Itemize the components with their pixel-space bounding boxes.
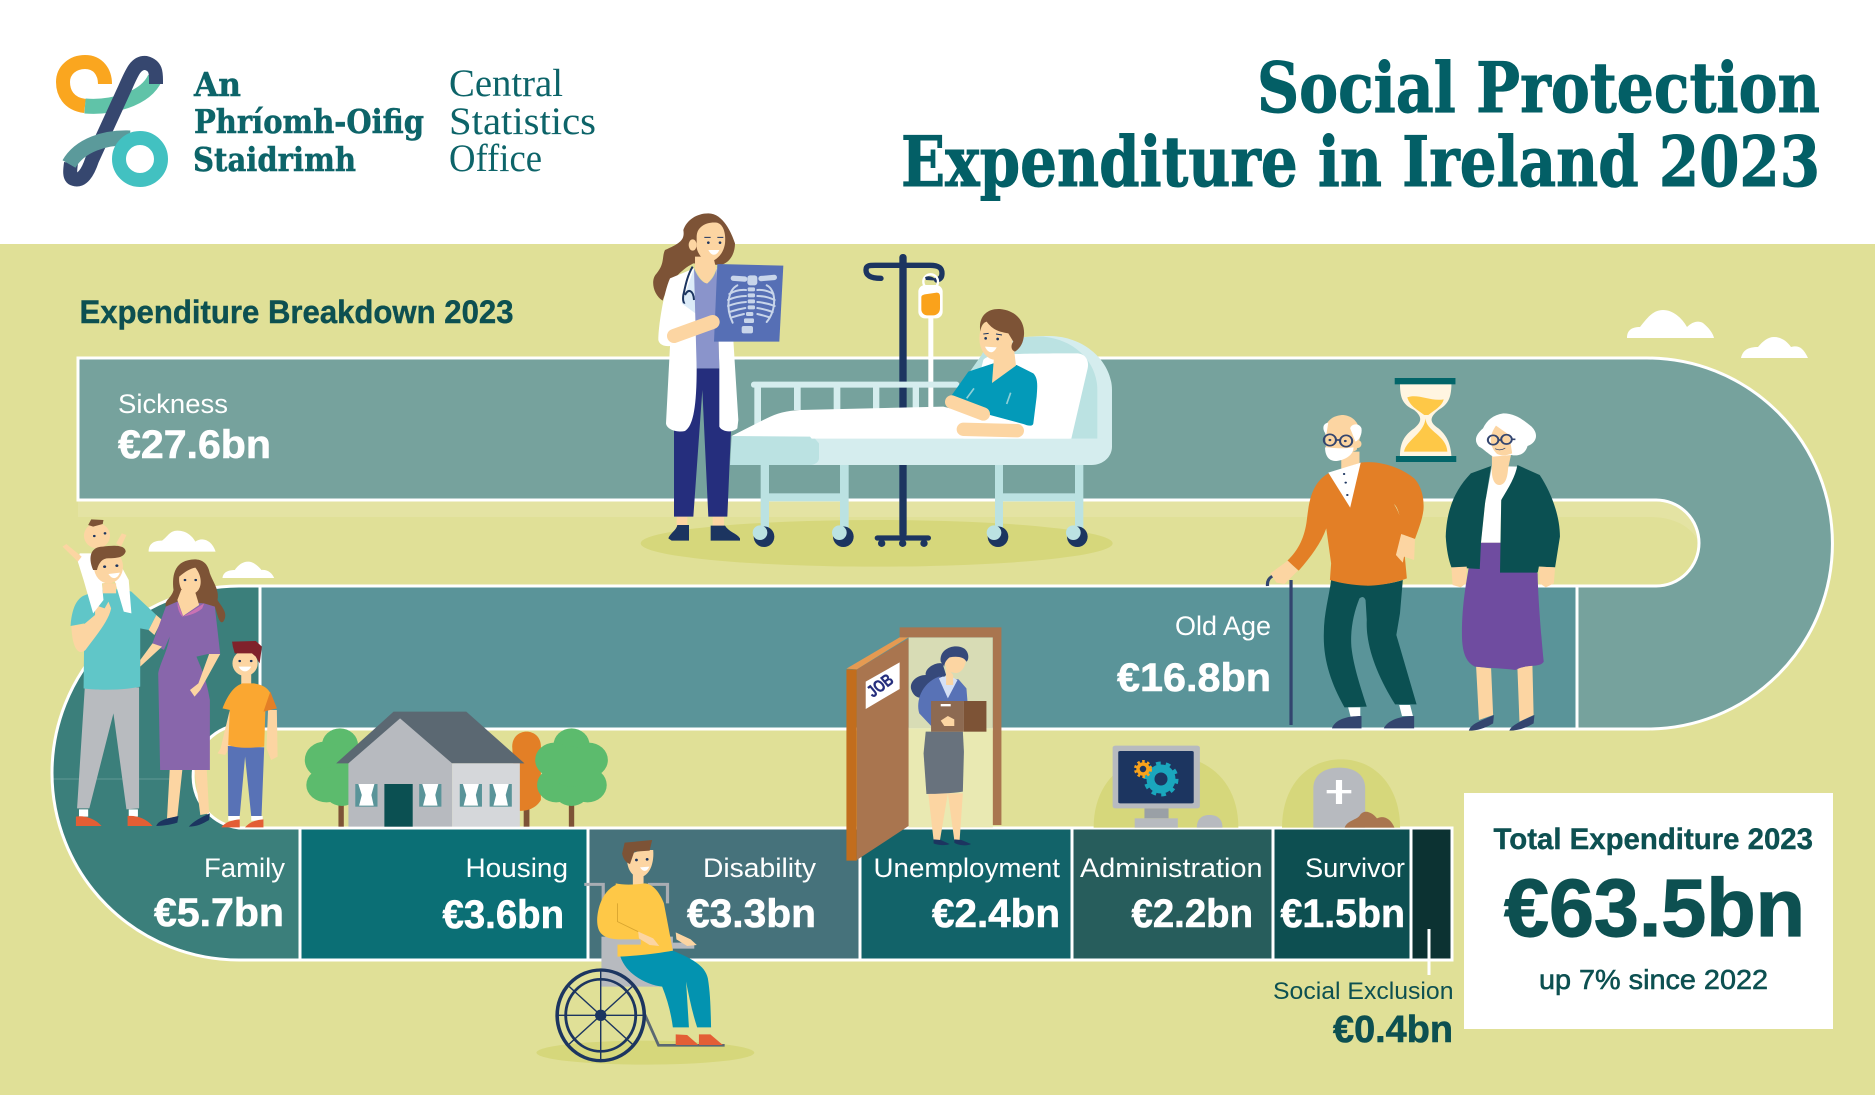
- segment: disability: [588, 828, 860, 960]
- label: unemployment: Unemployment: [874, 853, 1061, 883]
- wheels: [753, 525, 1088, 547]
- label: sickness: [118, 389, 271, 467]
- label: sickness: Sickness: [118, 389, 228, 419]
- segment: administration: [1072, 828, 1273, 960]
- logo wordmark Irish: [193, 65, 424, 179]
- label: old age: [1117, 611, 1271, 700]
- label: family: Family: [204, 853, 286, 883]
- illustration: man in wheelchair: [536, 840, 754, 1065]
- logo mark: [63, 62, 161, 180]
- wheelchair shadow: [536, 1041, 754, 1065]
- label: old age: Old Age: [1175, 611, 1271, 641]
- label: survivor: Survivor: [1305, 853, 1405, 883]
- label: sickness: €27.6bn: [118, 423, 271, 467]
- family band seam: [53, 778, 170, 780]
- label: social exclusion: Social Exclusion: [1273, 978, 1454, 1005]
- band shadow: [78, 501, 1699, 543]
- label: unemployment: €2.4bn: [932, 892, 1060, 936]
- label: survivor: [1280, 853, 1405, 936]
- label: social exclusion: [1273, 978, 1454, 1051]
- door leaf: JOB: [863, 670, 898, 701]
- logo wordmark English: Office: [449, 137, 542, 180]
- boy: [218, 641, 278, 827]
- clouds top right: [1627, 310, 1808, 358]
- label: survivor: €1.5bn: [1280, 892, 1405, 936]
- logo wordmark Irish: Staidrimh: [193, 140, 356, 179]
- house: [336, 712, 524, 827]
- hourglass: [1395, 378, 1456, 462]
- logo wordmark English: Statistics: [449, 100, 596, 143]
- woman with box: [911, 646, 986, 845]
- ground shadow: [641, 520, 1113, 567]
- illustration: job door: [846, 627, 1001, 861]
- logo wordmark English: Central: [449, 62, 563, 105]
- bed frame: [730, 336, 1112, 465]
- logo wordmark English: [449, 62, 596, 180]
- bed rail: [751, 382, 959, 425]
- wheelchair wheel: [557, 970, 644, 1061]
- illustration: hospital bed scene: [641, 213, 1113, 567]
- halo survivor: [1282, 759, 1400, 828]
- band: sickness: [78, 358, 1832, 729]
- label: housing: Housing: [466, 853, 568, 883]
- illustration: house and trees: [305, 712, 608, 827]
- panel: total expenditure: Total Expenditure 2023: [1494, 823, 1813, 856]
- label: disability: Disability: [703, 853, 817, 883]
- tombstone: [1313, 768, 1394, 828]
- label: family: [154, 853, 286, 935]
- label: social exclusion: €0.4bn: [1333, 1009, 1453, 1051]
- panel: total expenditure: [1464, 793, 1833, 1029]
- label: family: €5.7bn: [154, 891, 284, 935]
- segment: social exclusion: [1411, 828, 1452, 960]
- x-ray ribs: [728, 285, 775, 323]
- olive background: [0, 244, 1875, 1095]
- label: unemployment: [874, 853, 1061, 936]
- heading: expenditure breakdown: Expenditure Breakdown 2023: [80, 294, 514, 330]
- segment: unemployment: [860, 828, 1072, 960]
- label: disability: [687, 853, 817, 936]
- label: administration: Administration: [1080, 853, 1262, 883]
- bed legs: [761, 463, 1083, 533]
- illustration: elderly couple with hourglass: [1267, 378, 1560, 731]
- blanket: [732, 407, 1070, 439]
- rider: [597, 840, 723, 1045]
- cloud: family left: [149, 531, 274, 578]
- patient: [948, 309, 1037, 431]
- label: disability: €3.3bn: [687, 892, 816, 936]
- door leaf: [846, 637, 909, 861]
- logo wordmark Irish: Phríomh-Oifig: [194, 102, 424, 141]
- iv pole: [866, 254, 942, 547]
- panel: total expenditure: up 7% since 2022: [1539, 964, 1768, 995]
- doctor: [653, 213, 783, 541]
- illustration: computer and tombstone: [1094, 746, 1400, 828]
- computer monitor: [1113, 746, 1222, 828]
- trees: [305, 728, 608, 827]
- halo admin: [1094, 755, 1238, 828]
- mother: [140, 559, 225, 827]
- logo wordmark Irish: An: [193, 65, 241, 104]
- label: administration: €2.2bn: [1132, 892, 1253, 936]
- father: [63, 519, 162, 826]
- label: administration: [1080, 853, 1262, 936]
- band: old age: [260, 586, 1577, 729]
- old man: [1267, 415, 1424, 728]
- label: old age: €16.8bn: [1117, 656, 1271, 700]
- segment: housing: [300, 828, 588, 960]
- illustration: family: [63, 519, 278, 827]
- label: housing: €3.6bn: [442, 893, 564, 937]
- old woman: [1446, 413, 1560, 731]
- segment: survivor: [1273, 828, 1411, 960]
- pointer: social exclusion: [1428, 929, 1430, 975]
- door frame: [900, 627, 1001, 827]
- title: [901, 48, 1820, 203]
- iv bag: [918, 274, 943, 407]
- label: housing: [442, 853, 568, 937]
- chair frame: [584, 884, 725, 1045]
- segment: family: [52, 586, 300, 960]
- icon: gears: [1136, 762, 1176, 794]
- panel: total expenditure: €63.5bn: [1504, 863, 1805, 954]
